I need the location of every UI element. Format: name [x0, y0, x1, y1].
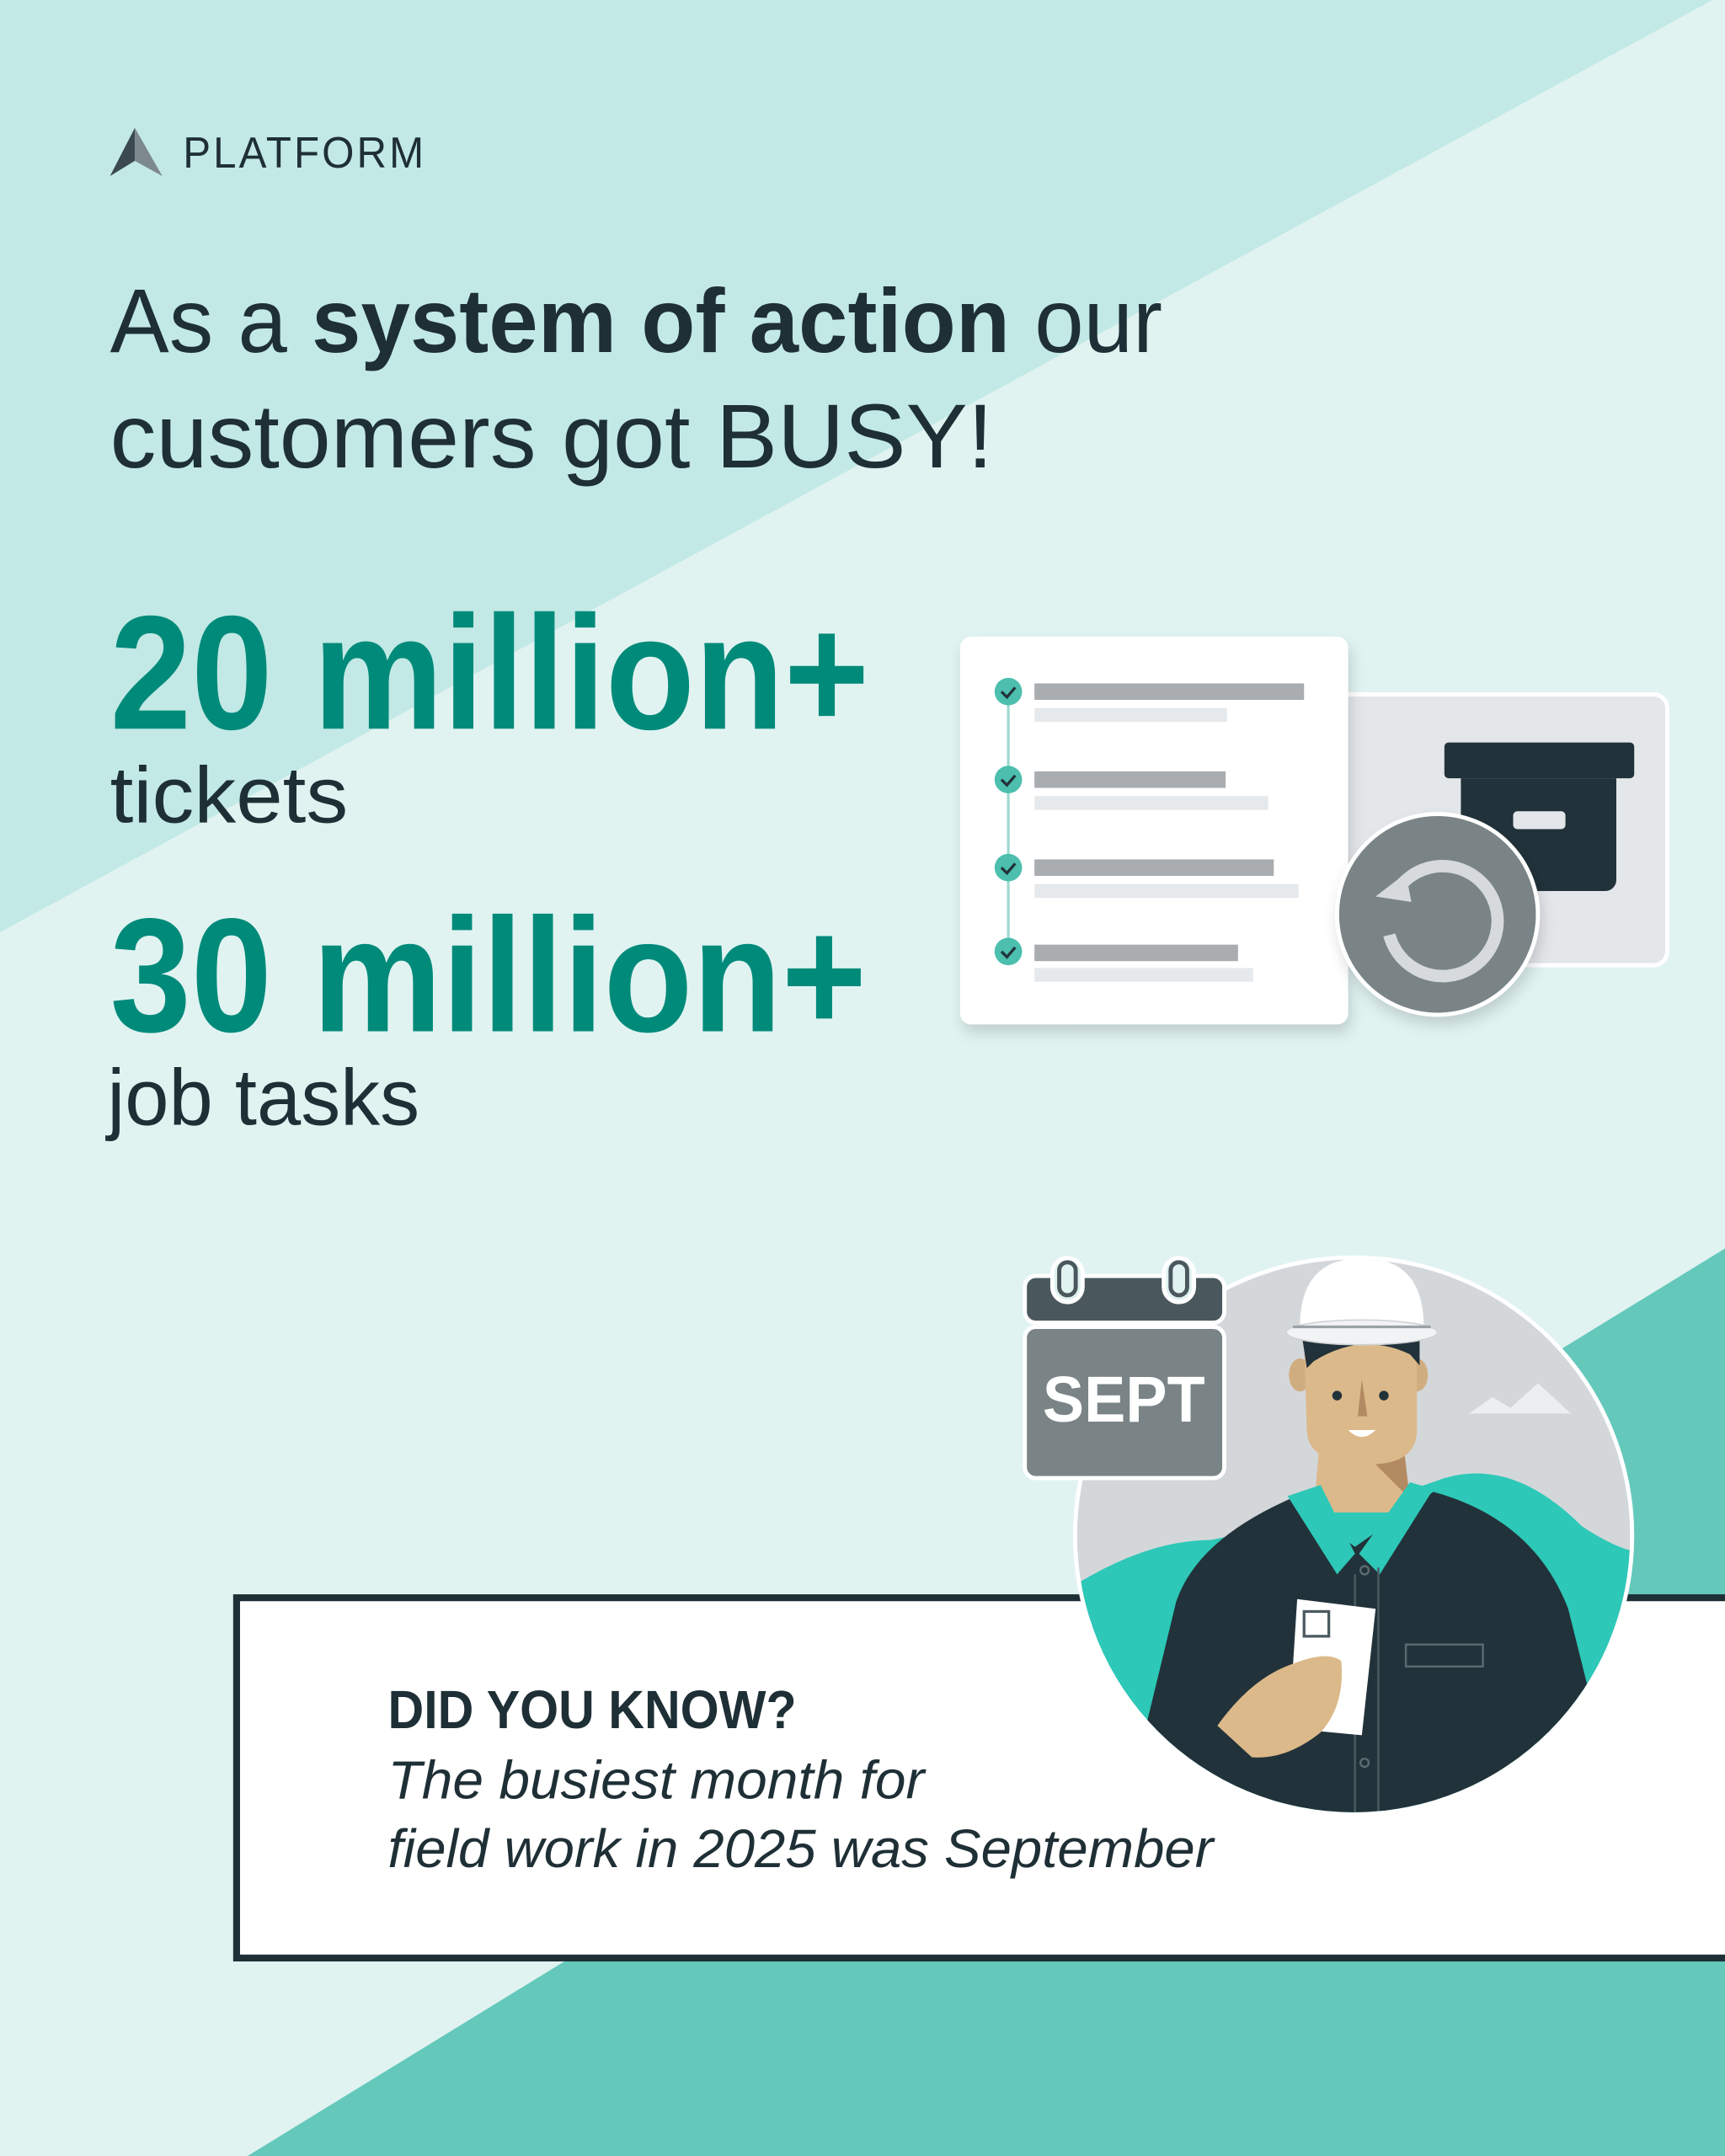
stat: tickets — [110, 582, 869, 840]
title: As a system of action our — [110, 270, 1162, 371]
icon: calendar SEPT: SEPT — [1043, 1364, 1205, 1436]
hills — [1081, 1474, 1630, 1812]
card and hand — [1289, 1599, 1375, 1735]
did you know box: field work in 2025 was September — [388, 1819, 1215, 1879]
illustration: worker in circle — [1073, 1255, 1634, 1812]
icon: calendar SEPT — [1025, 1258, 1225, 1478]
title: customers got BUSY! — [110, 385, 993, 487]
head — [1289, 1358, 1306, 1391]
checklist card — [960, 637, 1348, 1024]
stat: job tasks: 30 million+ — [110, 885, 867, 1065]
logo: PLATFORM — [183, 129, 426, 178]
icon: archive box — [1445, 743, 1634, 891]
stat: tickets: tickets — [110, 750, 348, 840]
mountains — [1469, 1383, 1571, 1413]
stat: job tasks — [104, 885, 867, 1143]
illustration: archive card — [1321, 694, 1667, 965]
shirt — [1147, 1492, 1587, 1812]
did you know box: DID YOU KNOW? — [388, 1680, 797, 1740]
did you know box: The busiest month for — [388, 1751, 927, 1811]
stat: tickets: 20 million+ — [110, 582, 869, 763]
did you know box — [237, 1598, 1725, 1958]
title — [110, 270, 1162, 487]
collar — [1288, 1485, 1355, 1574]
neck — [1316, 1454, 1407, 1513]
icon: refresh circle — [1337, 814, 1538, 1015]
hard hat — [1300, 1258, 1423, 1327]
stat: job tasks: job tasks — [104, 1054, 419, 1143]
